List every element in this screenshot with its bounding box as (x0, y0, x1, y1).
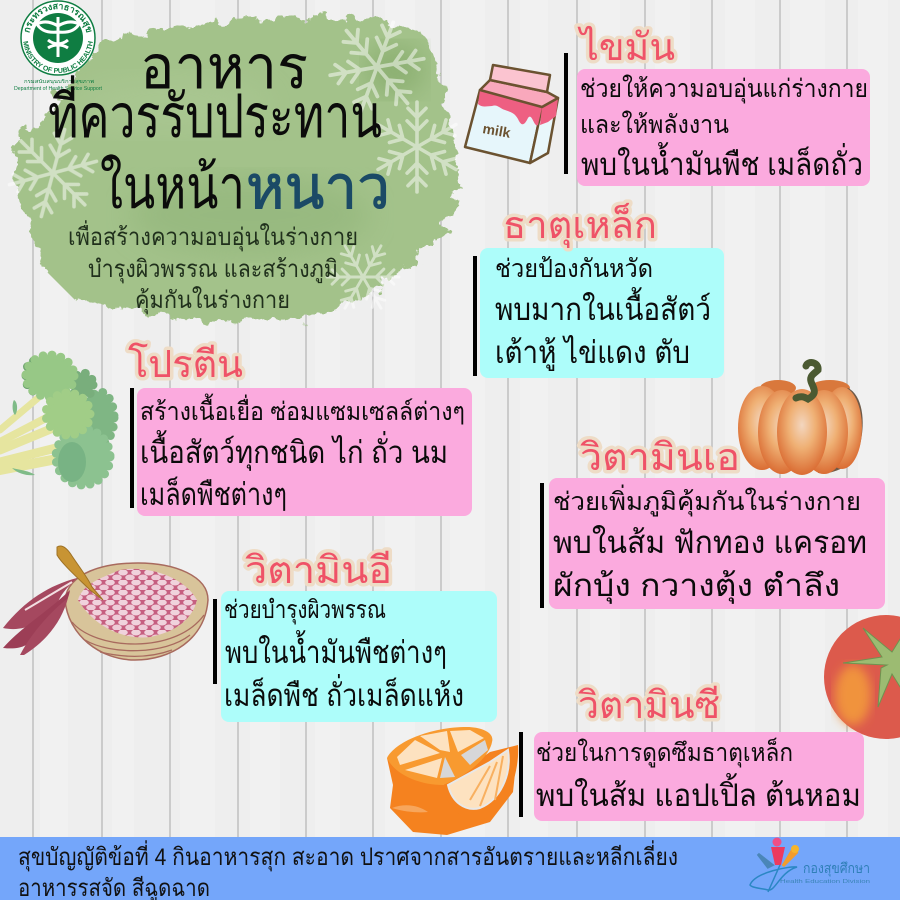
logo: Ministry of Public Health (14, 0, 103, 92)
icon: tomato (824, 615, 900, 739)
logo: Ministry of Public Health: กระทรวงสาธารณสุข (24, 3, 92, 33)
icon: orange slices (387, 727, 518, 835)
snowflake decorations (0, 7, 461, 326)
icon: bowl of grains (3, 546, 208, 660)
heading: วิตามินอี: วิตามินอี (245, 550, 392, 592)
text block: protein: สร้างเนื้อเยื่อ ซ่อมแซมเซลล์ต่างๆ (140, 393, 465, 426)
text block: vitamin C: พบในส้ม แอปเปิ้ล ต้นหอม (536, 773, 861, 813)
logo: health education division: Health Education Division (780, 879, 870, 885)
panel: vitamin C (วิตามินซี) (519, 685, 864, 821)
text block: vitamin C: ช่วยในการดูดซึมธาตุเหล็ก (536, 737, 793, 768)
heading: วิตามินซี: วิตามินซี (578, 685, 720, 727)
text block: vitamin A: ช่วยเพิ่มภูมิคุ้มกันในร่างกาย (553, 484, 861, 517)
icon: milk carton (465, 65, 558, 163)
logo: Ministry of Public Health: MINISTRY OF PUBLIC HEALTH (23, 41, 93, 73)
text block: fat: และให้พลังงาน (580, 110, 729, 139)
heading: ไขมัน: ไขมัน (577, 26, 675, 69)
subtitle (68, 220, 358, 315)
text block: iron: เต้าหู้ ไข่แดง ตับ (495, 335, 690, 371)
text block: vitamin A (553, 484, 867, 605)
text block: fat: ช่วยให้ความอบอุ่นแก่ร่างกาย (580, 74, 868, 104)
text block: vitamin C (536, 737, 861, 813)
subtitle: คุ้มกันในร่างกาย (135, 286, 290, 315)
logo: health education division (750, 838, 870, 892)
text block: vitamin E: ช่วยบำรุงผิวพรรณ (224, 596, 386, 625)
footer text: สุขบัญญัติข้อที่ 4 กินอาหารสุก สะอาด ปราศจากสารอันตรายและหลีกเลี่ยง (18, 840, 678, 872)
title (48, 34, 390, 221)
green watercolor blob behind the title (14, 16, 460, 322)
footer bar (0, 837, 900, 900)
text block: protein: เมล็ดพืชต่างๆ (140, 476, 287, 512)
icon: milk carton: milk (481, 120, 512, 141)
subtitle: เพื่อสร้างความอบอุ่นในร่างกาย (68, 220, 358, 252)
icon: pumpkin (738, 363, 863, 475)
title: ในหน้า (100, 154, 245, 221)
panel: vitamin E (วิตามินอี) (213, 550, 497, 722)
text block: protein: เนื้อสัตว์ทุกชนิด ไก่ ถั่ว นม (140, 430, 448, 472)
text block: vitamin E (224, 596, 464, 713)
text block: vitamin E: เมล็ดพืช ถั่วเมล็ดแห้ง (224, 674, 464, 713)
text block: vitamin A: ผักบุ้ง กวางตุ้ง ตำลึง (553, 568, 840, 605)
panel: vitamin A (วิตามินเอ) (540, 437, 885, 609)
logo: health education division: กองสุขศึกษา (803, 860, 870, 877)
title: ที่ควรรับประทาน (48, 75, 382, 150)
title: หนาว (246, 154, 390, 221)
text block: fat (580, 74, 868, 182)
subtitle: บำรุงผิวพรรณ และสร้างภูมิ (88, 256, 338, 284)
text block: iron: พบมากในเนื้อสัตว์ (495, 287, 711, 327)
text block: iron (495, 255, 711, 371)
logo: Ministry of Public Health: กรมสนับสนุนบริการสุขภาพ (24, 78, 94, 85)
panel: protein (โปรตีน) (128, 342, 472, 516)
text block: protein (140, 393, 465, 512)
text block: iron: ช่วยป้องกันหวัด (495, 255, 653, 283)
text block: vitamin A: พบในส้ม ฟักทอง แครอท (553, 525, 867, 560)
panel: fat (ไขมัน) (564, 26, 870, 186)
footer text (18, 840, 678, 900)
panel: iron (ธาตุเหล็ก) (473, 202, 724, 378)
logo: Ministry of Public Health: Department of Health Service Support (14, 86, 103, 92)
icon: broccoli (0, 355, 114, 485)
text block: fat: พบในน้ำมันพืช เมล็ดถั่ว (581, 142, 863, 182)
heading: โปรตีน: โปรตีน (128, 342, 243, 386)
heading: ธาตุเหล็ก: ธาตุเหล็ก (503, 202, 657, 248)
title: อาหาร (140, 34, 308, 101)
text block: vitamin E: พบในน้ำมันพืชต่างๆ (225, 630, 447, 670)
heading: วิตามินเอ: วิตามินเอ (580, 437, 740, 479)
